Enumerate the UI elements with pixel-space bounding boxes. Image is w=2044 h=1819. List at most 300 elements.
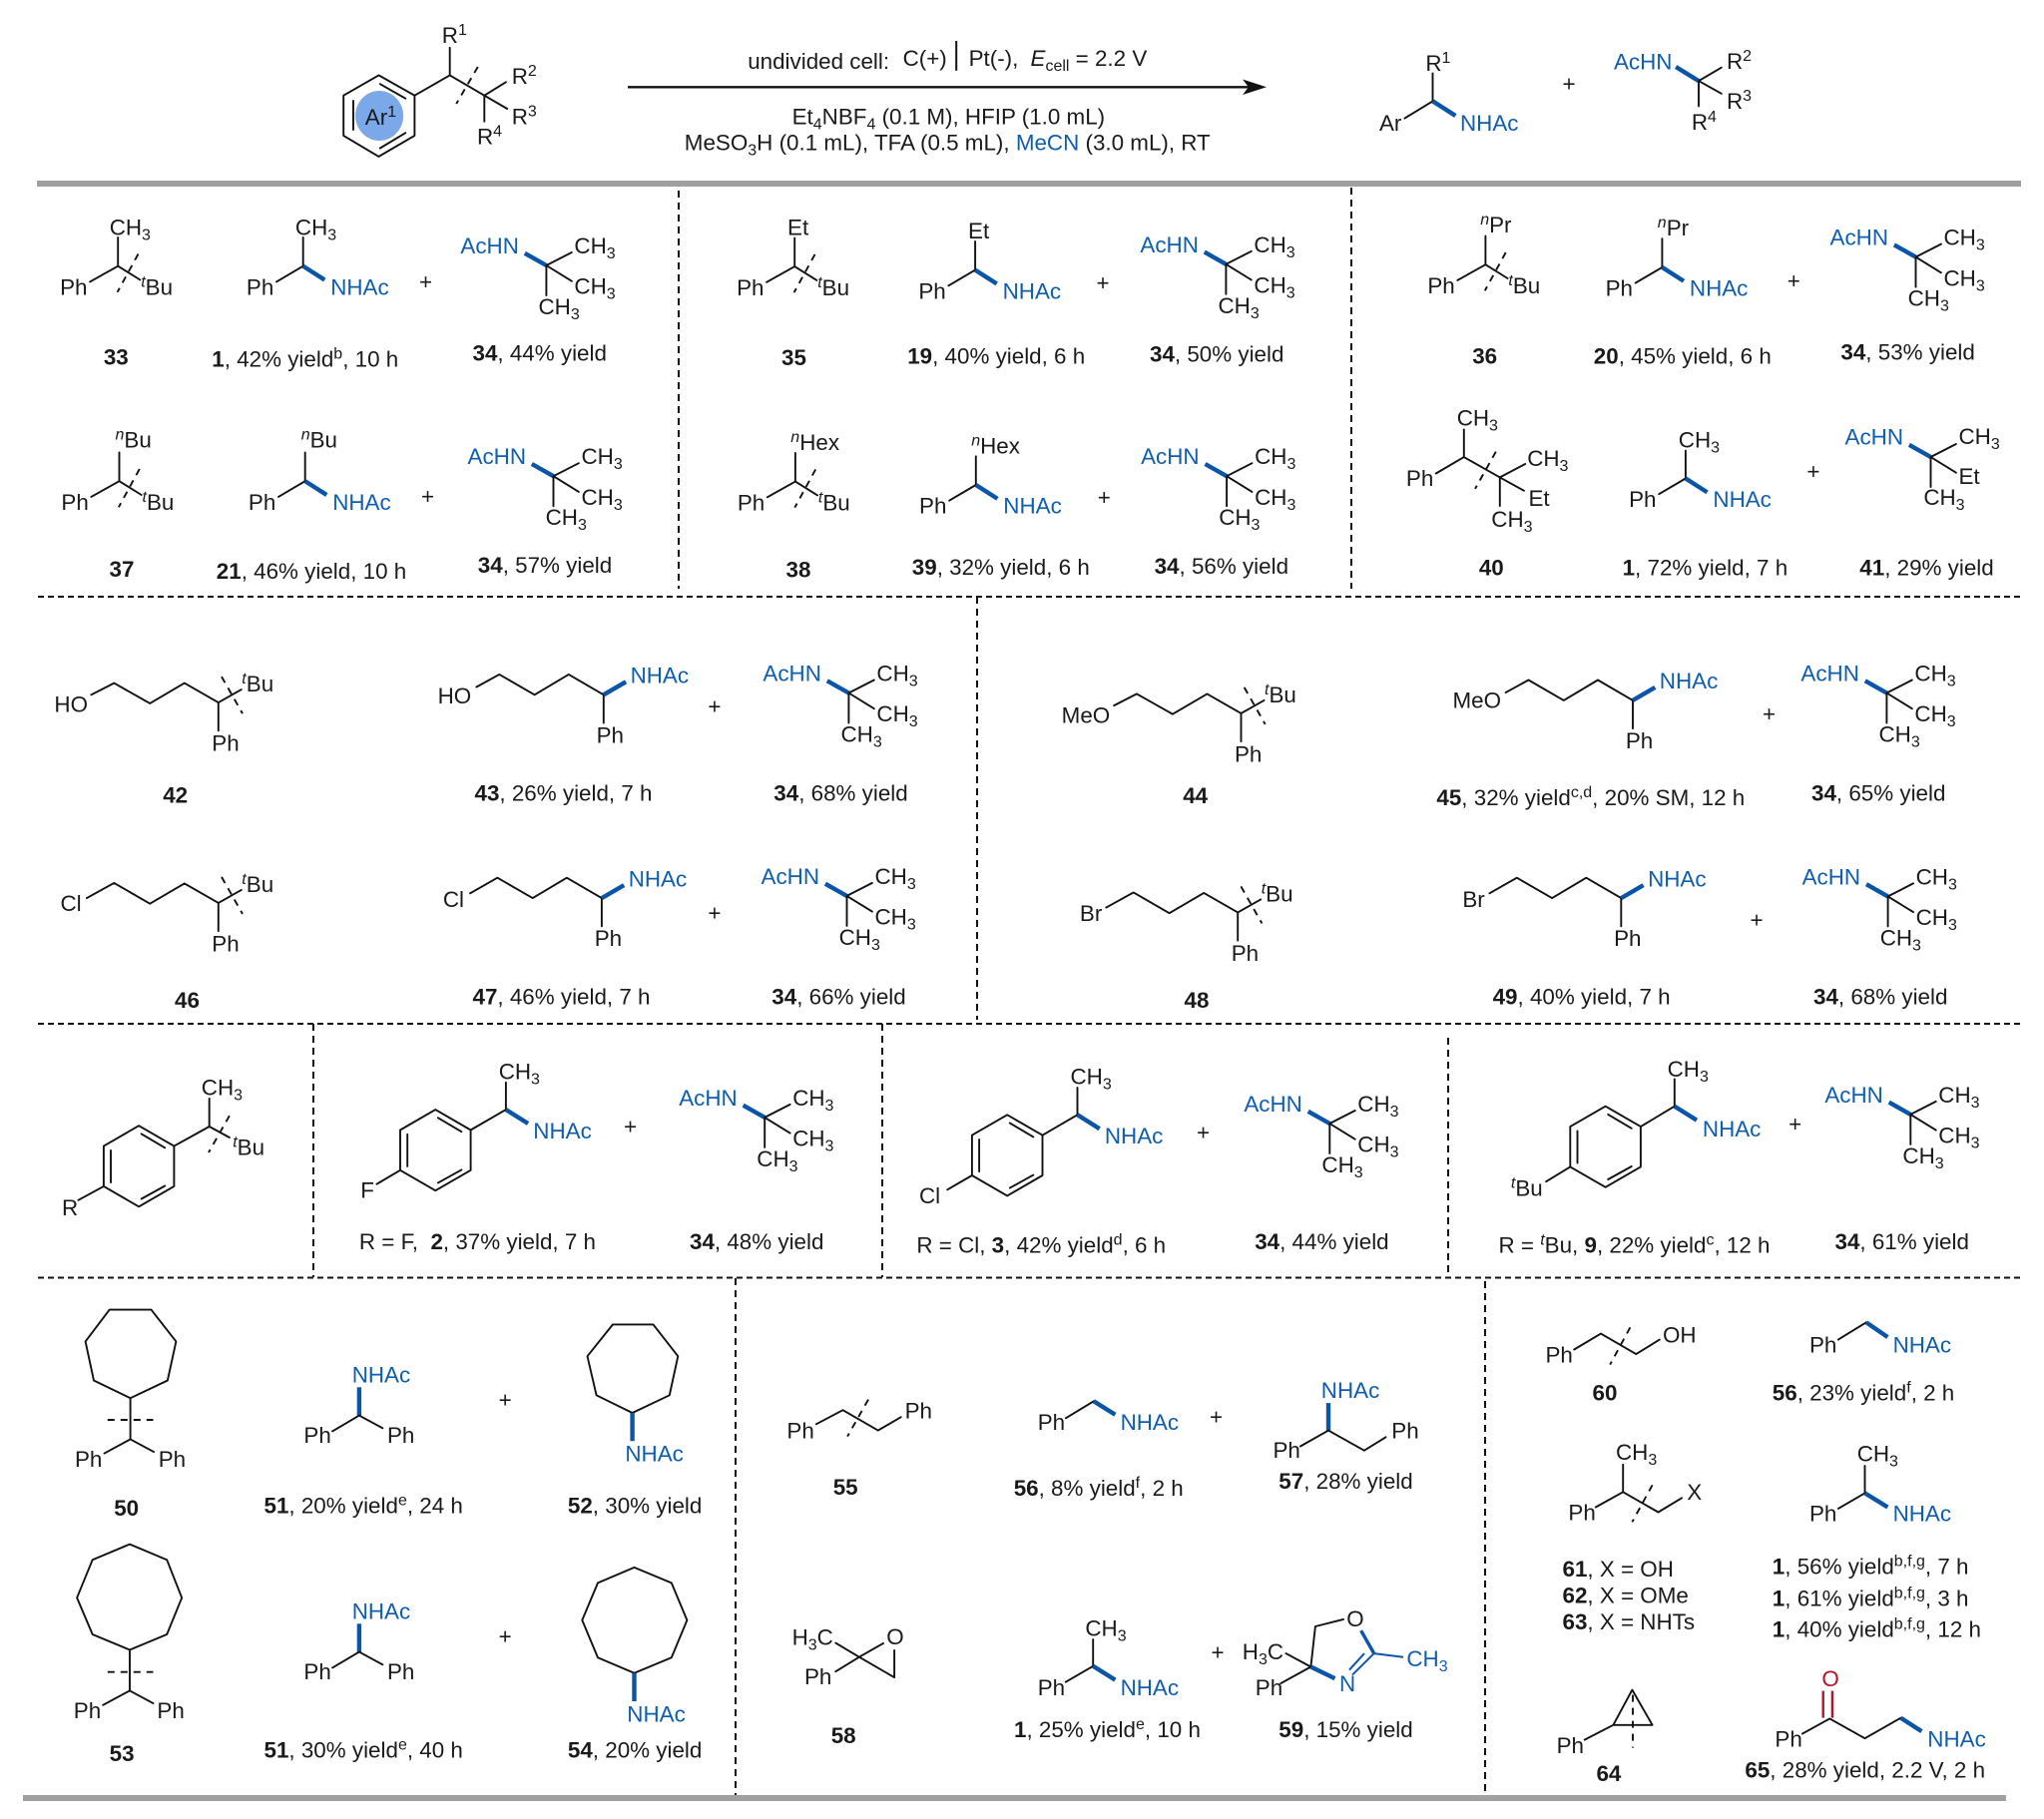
- product 34: 3: [825, 1138, 834, 1155]
- product 43: Ph: [597, 722, 624, 747]
- product 34: AcHN: [1800, 661, 1859, 686]
- caption product 20: 20, 45% yield, 6 h: [1594, 343, 1772, 368]
- product 56: [1038, 1401, 1179, 1435]
- product 34: CH: [1944, 265, 1976, 290]
- product 51: Ph: [387, 1659, 414, 1684]
- labels 61, 62, 63: 62, X = OMe: [1563, 1584, 1689, 1608]
- caption product 51: e: [398, 1736, 407, 1753]
- molecule 40: Et: [1529, 486, 1550, 511]
- product 34: AcHN: [1824, 1083, 1883, 1108]
- caption product 56: 56, 8% yield: [1014, 1476, 1136, 1501]
- product 34: CH: [1938, 1124, 1971, 1148]
- label 48: 48: [1185, 988, 1209, 1013]
- product 34: CH: [574, 233, 607, 258]
- molecule 48: [1080, 880, 1293, 966]
- caption product 56: , 2 h: [1140, 1476, 1184, 1501]
- molecule 61-63: Ph: [1568, 1501, 1596, 1526]
- text: conditions below arrow: MeCN (3.0 mL), RT: [1016, 130, 1211, 155]
- product 1: [1809, 1441, 1951, 1527]
- product 34: 3: [1948, 917, 1957, 934]
- product 57: Ph: [1274, 1438, 1300, 1463]
- molecule 38: n: [790, 429, 799, 446]
- molecule 58: 3: [808, 1637, 817, 1654]
- product 34: 3: [1912, 937, 1921, 954]
- captions product 1 from 61, 62, 63: , 7 h: [1925, 1555, 1969, 1580]
- molecule 58: [792, 1624, 904, 1689]
- molecule 33: CH: [110, 215, 142, 239]
- molecule 40: Ph: [1406, 466, 1433, 491]
- caption product 51: 51, 20% yield: [263, 1494, 398, 1519]
- caption product 9: 9, 22% yield: [1584, 1233, 1706, 1258]
- product 3: NHAc: [1105, 1124, 1163, 1148]
- product 34: CH: [1944, 226, 1976, 250]
- molecule 55: Ph: [905, 1398, 932, 1423]
- molecule 38: t: [818, 489, 823, 506]
- product: tertiary alkyl amide: R: [1692, 110, 1708, 135]
- product 34: [1830, 226, 1985, 315]
- molecule 64: [1557, 1690, 1653, 1758]
- product 45: NHAc: [1660, 669, 1718, 693]
- product 1: NHAc: [1893, 1502, 1951, 1527]
- plus sign: +: [708, 693, 721, 718]
- product 59: Ph: [1256, 1675, 1282, 1700]
- caption product 1: 1, 25% yield: [1014, 1717, 1136, 1742]
- molecule 60: Ph: [1545, 1343, 1573, 1368]
- substrate: general aryl alkane: 1: [387, 104, 396, 121]
- molecule 37: n: [116, 427, 124, 444]
- product 47: Ph: [595, 926, 622, 951]
- molecule 46: Cl: [60, 891, 82, 916]
- label 58: 58: [831, 1723, 856, 1748]
- molecule 33: 3: [142, 227, 151, 243]
- label 46: 46: [175, 988, 200, 1013]
- molecule 46: t: [242, 871, 247, 888]
- product 34: [460, 233, 616, 323]
- product 34: CH: [1254, 232, 1286, 257]
- captions product 1 from 61, 62, 63: , 3 h: [1925, 1586, 1969, 1610]
- text: conditions below arrow: MeSO: [685, 130, 748, 155]
- caption product 1: , 10 h: [342, 346, 398, 371]
- panel: row 1 right, substrates 36 and 40: [1406, 212, 2000, 581]
- molecule 60: OH: [1663, 1322, 1697, 1347]
- caption product 34: 34, 44% yield: [473, 341, 607, 366]
- product 34: 3: [1251, 305, 1260, 322]
- product 34: 3: [1971, 1095, 1980, 1112]
- labels 61, 62, 63: 63, X = NHTs: [1563, 1609, 1695, 1634]
- molecule 40: 3: [1560, 458, 1569, 475]
- product 52: NHAc: [625, 1442, 684, 1467]
- molecule 36: n: [1480, 212, 1489, 228]
- product 47: Cl: [443, 887, 464, 912]
- product: benzylic amide: 1: [1441, 50, 1450, 67]
- product 34: 3: [1286, 456, 1295, 473]
- product 3: CH: [1070, 1064, 1103, 1090]
- product 41: CH: [1958, 424, 1991, 449]
- caption product 1: e: [1136, 1716, 1145, 1733]
- product 34: CH: [1914, 661, 1947, 686]
- product 34: CH: [574, 274, 607, 299]
- label 40: 40: [1479, 556, 1504, 581]
- product 9: 3: [1700, 1069, 1709, 1086]
- product 41: Et: [1958, 464, 1980, 489]
- plus sign: +: [1788, 1112, 1801, 1137]
- product 21: Bu: [310, 428, 337, 453]
- product 34: 3: [578, 517, 587, 534]
- product 59: 3: [1259, 1651, 1268, 1668]
- caption product 54: 54, 20% yield: [568, 1737, 702, 1762]
- product 34: AcHN: [763, 661, 821, 686]
- label 37: 37: [110, 557, 134, 582]
- product 3: [919, 1064, 1163, 1208]
- label 60: 60: [1593, 1381, 1617, 1406]
- product: benzylic amide: Ar: [1379, 111, 1402, 136]
- product: tertiary alkyl amide: 4: [1708, 109, 1717, 126]
- molecule: general para-R substrate: 3: [234, 1087, 243, 1104]
- text: conditions below arrow: 4: [813, 116, 822, 133]
- captions product 1 from 61, 62, 63: b,f,g: [1894, 1585, 1925, 1601]
- label 42: 42: [163, 783, 188, 808]
- product 43: [438, 664, 689, 747]
- molecule 55: Ph: [786, 1418, 814, 1443]
- product 34: AcHN: [1140, 232, 1199, 257]
- product 57: NHAc: [1321, 1378, 1379, 1403]
- molecule 61-63: [1568, 1440, 1702, 1526]
- product 34: [1140, 232, 1295, 322]
- caption product 51: e: [398, 1493, 407, 1510]
- product 34: 3: [825, 1098, 834, 1115]
- product 2: F: [360, 1178, 374, 1203]
- captions product 1 from 61, 62, 63: 1, 56% yield: [1773, 1555, 1894, 1580]
- molecule 35: t: [817, 274, 822, 291]
- product 34: 3: [1976, 237, 1985, 254]
- text: conditions below arrow: [685, 104, 1211, 159]
- product 34: CH: [1218, 293, 1251, 318]
- product 21: Ph: [249, 490, 275, 515]
- caption product 34: 34, 66% yield: [771, 984, 906, 1009]
- molecule 38: [738, 429, 850, 515]
- molecule 36: Bu: [1513, 273, 1540, 298]
- molecule 44: MeO: [1062, 703, 1110, 728]
- substrate: general aryl alkane: [343, 22, 537, 157]
- label 64: 64: [1596, 1761, 1622, 1786]
- product 1: NHAc: [330, 274, 389, 299]
- caption product 52: 52, 30% yield: [568, 1494, 702, 1519]
- molecule 46: Bu: [247, 872, 273, 897]
- product 34: 3: [1286, 497, 1295, 514]
- product 51: Ph: [303, 1423, 331, 1448]
- product 2: NHAc: [533, 1119, 592, 1143]
- product 47: [443, 866, 687, 951]
- captions product 1 from 61, 62, 63: 1, 61% yield: [1773, 1586, 1894, 1610]
- product 49: Br: [1462, 887, 1485, 912]
- molecule 50: Ph: [75, 1447, 102, 1472]
- product 34: CH: [839, 925, 871, 950]
- product 34: CH: [1878, 722, 1911, 746]
- molecule 40: CH: [1457, 406, 1489, 431]
- product 34: CH: [1321, 1152, 1354, 1177]
- product 49: [1462, 866, 1707, 951]
- product 34: CH: [581, 485, 614, 510]
- molecule 42: HO: [54, 692, 88, 717]
- caption product 34: 34, 48% yield: [690, 1229, 823, 1254]
- product 65: NHAc: [1927, 1727, 1986, 1752]
- caption product 34: 34, 65% yield: [1811, 780, 1945, 806]
- molecule 44: [1062, 682, 1296, 766]
- product 34: CH: [581, 444, 614, 469]
- molecule 53: Ph: [74, 1698, 101, 1723]
- product 34: 3: [607, 245, 616, 262]
- product 34: CH: [874, 905, 907, 930]
- product 34: AcHN: [1830, 226, 1888, 250]
- caption product 2: R = F, 2, 37% yield, 7 h: [359, 1229, 596, 1254]
- text: conditions below arrow: 3: [748, 142, 757, 159]
- product 20: n: [1658, 215, 1667, 231]
- substrate: general aryl alkane: Ar: [365, 105, 387, 130]
- product 34: 3: [873, 734, 882, 750]
- product 9: t: [1511, 1174, 1516, 1191]
- text: conditions above arrow: C(+): [903, 46, 947, 71]
- panel: general reaction scheme header: [343, 22, 1752, 159]
- substrate: general aryl alkane: R: [512, 64, 528, 89]
- product 1: 3: [1711, 440, 1720, 457]
- molecule 46: [60, 871, 273, 956]
- product 1: NHAc: [1121, 1675, 1179, 1700]
- product 2: [360, 1059, 592, 1203]
- product 34: CH: [1916, 905, 1948, 930]
- product: tertiary alkyl amide: 3: [1743, 88, 1752, 105]
- product 34: [1824, 1083, 1980, 1172]
- product 34: CH: [757, 1146, 789, 1171]
- product 9: Bu: [1515, 1175, 1543, 1200]
- product: benzylic amide: R: [1425, 51, 1441, 76]
- molecule 48: Ph: [1232, 941, 1259, 966]
- plus sign: +: [1197, 1121, 1210, 1145]
- product 34: CH: [1914, 701, 1947, 726]
- product 57: [1274, 1378, 1419, 1463]
- product 34: CH: [1908, 286, 1940, 311]
- panel: row 1 middle, substrates 35 and 38: [737, 215, 1295, 583]
- molecule 44: Ph: [1235, 741, 1262, 766]
- product 34: AcHN: [679, 1086, 738, 1111]
- molecule 37: Bu: [147, 490, 174, 515]
- molecule 33: Ph: [60, 274, 87, 299]
- label 55: 55: [833, 1475, 858, 1500]
- molecule 55: [786, 1398, 932, 1443]
- product 1: [247, 215, 389, 299]
- captions product 1 from 61, 62, 63: b,f,g: [1894, 1616, 1925, 1633]
- product 34: CH: [539, 294, 571, 319]
- molecule 40: 3: [1489, 418, 1498, 435]
- caption product 9: t: [1540, 1232, 1545, 1249]
- product 1: 3: [1889, 1453, 1898, 1470]
- molecule 44: Bu: [1269, 682, 1296, 707]
- product 59: CH: [1406, 1646, 1439, 1671]
- product 65: O: [1821, 1666, 1839, 1691]
- molecule 33: [60, 215, 173, 299]
- product 34: [1802, 864, 1957, 954]
- product 2: CH: [499, 1059, 531, 1084]
- product 39: n: [971, 433, 980, 450]
- product 49: Ph: [1614, 926, 1641, 951]
- product 43: NHAc: [631, 664, 689, 688]
- molecule 60: [1545, 1322, 1697, 1368]
- product 1: [1038, 1616, 1179, 1700]
- product 2: 3: [531, 1071, 540, 1088]
- caption product 9: R =: [1499, 1233, 1534, 1258]
- product 1: Ph: [1629, 487, 1657, 512]
- panel: row 3, para-substituted arenes: [62, 1057, 1980, 1258]
- product 34: [468, 444, 623, 534]
- product 34: CH: [1254, 273, 1286, 297]
- product 34: AcHN: [460, 233, 519, 258]
- product 59: [1243, 1606, 1448, 1700]
- product 34: 3: [909, 673, 918, 690]
- product 34: AcHN: [468, 444, 526, 469]
- product 34: [763, 661, 918, 750]
- text: conditions above arrow: E: [1030, 46, 1046, 71]
- caption product 45: c,d: [1571, 784, 1592, 801]
- caption product 34: 34, 53% yield: [1840, 339, 1975, 365]
- product 34: 3: [571, 306, 580, 323]
- plus sign: +: [708, 900, 721, 925]
- product 34: [762, 864, 916, 954]
- caption product 65: 65, 28% yield, 2.2 V, 2 h: [1745, 1758, 1985, 1783]
- product 56: NHAc: [1893, 1332, 1951, 1357]
- molecule 50: Ph: [159, 1447, 186, 1472]
- caption product 1: 1, 72% yield, 7 h: [1623, 556, 1788, 581]
- plus sign: +: [1098, 485, 1111, 510]
- caption product 34: 34, 50% yield: [1150, 341, 1283, 366]
- text: conditions below arrow: Et: [792, 104, 813, 129]
- product: tertiary alkyl amide: R: [1727, 49, 1743, 74]
- caption product 3: d: [1114, 1232, 1123, 1249]
- plus sign: +: [1788, 268, 1800, 293]
- molecule 64: Ph: [1557, 1733, 1584, 1758]
- caption product 34: 34, 56% yield: [1155, 554, 1288, 579]
- product 59: C: [1268, 1639, 1283, 1664]
- product 59: H: [1243, 1639, 1259, 1664]
- caption product 39: 39, 32% yield, 6 h: [912, 555, 1090, 580]
- product 34: 3: [1286, 284, 1295, 301]
- molecule 38: Ph: [738, 490, 765, 515]
- product 56: [1809, 1322, 1951, 1357]
- product 34: 3: [1947, 713, 1956, 730]
- caption product 57: 57, 28% yield: [1278, 1469, 1413, 1494]
- plus sign: +: [419, 269, 432, 294]
- product 1: CH: [1085, 1616, 1118, 1640]
- product 34: CH: [1916, 864, 1948, 889]
- captions product 1 from 61, 62, 63: , 12 h: [1925, 1617, 1981, 1642]
- molecule 58: O: [886, 1624, 904, 1649]
- product 34: CH: [840, 722, 873, 746]
- molecule 35: Bu: [822, 275, 849, 300]
- captions product 1 from 61, 62, 63: [1773, 1554, 1981, 1642]
- molecule 35: Et: [787, 215, 809, 239]
- substrate: general aryl alkane: 4: [493, 124, 502, 141]
- product 34: CH: [1880, 925, 1912, 950]
- plus sign: +: [1763, 701, 1776, 726]
- label 44: 44: [1183, 783, 1209, 808]
- molecule 58: H: [792, 1625, 808, 1650]
- product 51: NHAc: [352, 1598, 410, 1623]
- caption product 59: 59, 15% yield: [1278, 1717, 1413, 1742]
- product 9: NHAc: [1703, 1117, 1761, 1141]
- product 34: 3: [1947, 673, 1956, 690]
- label 53: 53: [110, 1741, 135, 1766]
- caption product 21: 21, 46% yield, 10 h: [217, 559, 406, 584]
- product 34: [1244, 1092, 1399, 1181]
- molecule 37: Ph: [61, 490, 89, 515]
- product 51: Ph: [303, 1659, 331, 1684]
- molecule 48: Br: [1080, 901, 1103, 926]
- product 47: NHAc: [629, 866, 687, 891]
- product 9: [1511, 1057, 1761, 1200]
- product 20: Ph: [1606, 276, 1633, 301]
- molecule: general para-R substrate: CH: [202, 1075, 234, 1100]
- caption product 9: Bu,: [1545, 1233, 1584, 1258]
- molecule 61-63: CH: [1616, 1440, 1648, 1465]
- product 3: 3: [1103, 1077, 1112, 1094]
- product 34: CH: [792, 1127, 825, 1151]
- product 59: N: [1339, 1671, 1355, 1696]
- product 34: 3: [871, 937, 880, 954]
- product 49: NHAc: [1648, 866, 1707, 891]
- product 34: CH: [1255, 485, 1286, 510]
- molecule 58: Ph: [804, 1664, 831, 1689]
- panel: row 2 left, substrates 42 and 46: [54, 661, 918, 1013]
- caption product 34: 34, 68% yield: [1813, 984, 1947, 1009]
- product 34: CH: [792, 1086, 825, 1111]
- product 39: Hex: [980, 434, 1020, 459]
- molecule 42: t: [242, 671, 247, 687]
- label 50: 50: [114, 1496, 139, 1521]
- plus sign: +: [1751, 908, 1764, 933]
- text: conditions above arrow: cell: [1045, 58, 1069, 75]
- product 34: 3: [607, 286, 616, 303]
- plus sign: +: [1562, 72, 1576, 96]
- plus sign: +: [499, 1624, 512, 1649]
- product 51: Ph: [387, 1423, 414, 1448]
- product 1: Ph: [1809, 1502, 1836, 1527]
- panel: row 4 middle, substrates 55 and 58: [786, 1378, 1448, 1748]
- product 34: 3: [907, 876, 916, 893]
- product 39: NHAc: [1003, 494, 1062, 519]
- product: benzylic amide: NHAc: [1460, 111, 1518, 136]
- product 34: 3: [1390, 1104, 1399, 1121]
- substrate: general aryl alkane: R: [512, 104, 528, 129]
- product 34: CH: [1219, 505, 1252, 530]
- molecule 38: Hex: [799, 430, 839, 455]
- caption product 56: , 2 h: [1911, 1381, 1954, 1406]
- product 34: 3: [1911, 734, 1920, 750]
- caption product 45: , 20% SM, 12 h: [1592, 785, 1745, 810]
- caption product 3: , 6 h: [1123, 1233, 1166, 1258]
- substrate: general aryl alkane: 3: [528, 103, 537, 120]
- product 34: [1800, 661, 1956, 750]
- product 56: NHAc: [1121, 1410, 1179, 1435]
- product 59: 3: [1439, 1658, 1448, 1675]
- product 1: NHAc: [1713, 487, 1772, 512]
- molecule 44: t: [1265, 682, 1270, 698]
- plus sign: +: [1211, 1640, 1225, 1665]
- panel: row 4 right, substrates 60 to 64: [1545, 1322, 1986, 1786]
- arrow: reaction arrow: [628, 80, 1267, 95]
- caption product 49: 49, 40% yield, 7 h: [1493, 984, 1671, 1009]
- product 34: 3: [909, 713, 918, 730]
- product 41: [1845, 424, 2000, 514]
- plus sign: +: [499, 1388, 512, 1413]
- molecule 40: CH: [1527, 446, 1560, 471]
